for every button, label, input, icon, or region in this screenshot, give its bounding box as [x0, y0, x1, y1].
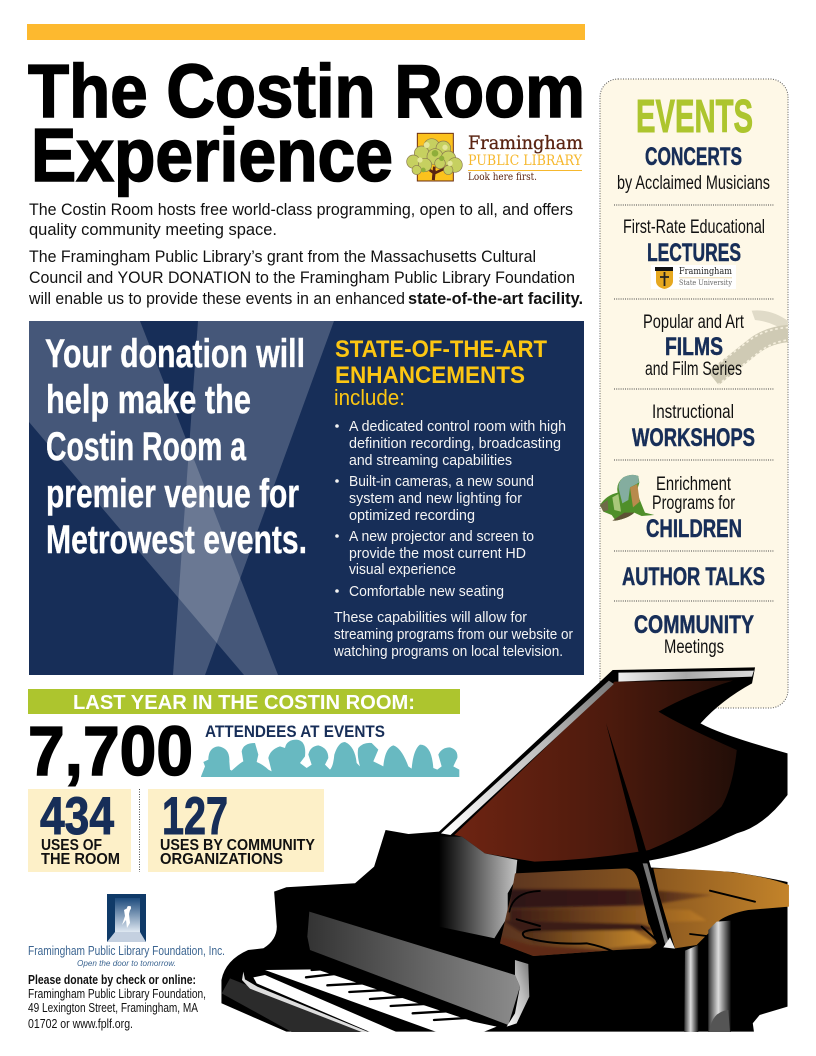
enhancements heading: ENHANCEMENTS	[335, 362, 525, 389]
author talks: AUTHOR TALKS	[622, 563, 765, 591]
enhancements heading: STATE-OF-THE-ART	[335, 336, 547, 363]
intro text: The Costin Room hosts free world-class programming, open to all, and offers	[29, 201, 573, 219]
donation heading: Metrowest events.	[46, 518, 307, 562]
community: COMMUNITY	[634, 611, 754, 639]
donation heading	[45, 332, 307, 562]
top yellow bar	[27, 24, 585, 40]
stat: 127 community uses: ORGANIZATIONS	[160, 851, 283, 868]
grand piano	[221, 667, 790, 1032]
intro text: Council and YOUR DONATION to the Framingham Public Library Foundation	[29, 269, 575, 287]
workshops: Instructional	[652, 402, 734, 423]
logo: Framingham Public Library: Framingham	[468, 132, 583, 154]
intro text	[28, 201, 583, 308]
stat: 127 community uses: USES BY COMMUNITY	[160, 837, 315, 854]
community: Meetings	[664, 637, 724, 658]
closing note: These capabilities will allow for	[334, 610, 527, 626]
bullet list: Comfortable new seating	[349, 584, 504, 600]
stat: 127 community uses: 127	[162, 787, 228, 846]
children: Programs for	[652, 493, 736, 514]
icon: film strip	[708, 310, 795, 385]
logo: Framingham Public Library: Look here first.	[468, 172, 537, 183]
stat: 7,700 attendees: 7,700	[28, 712, 193, 790]
donation heading: Your donation will	[45, 332, 305, 376]
stat: 434 uses	[28, 787, 131, 872]
concerts: CONCERTS	[645, 143, 742, 171]
bullet list: and streaming capabilities	[349, 453, 512, 469]
enhancements heading: include:	[334, 385, 405, 410]
films: Popular and Art	[643, 312, 745, 333]
children: CHILDREN	[646, 515, 742, 543]
intro text: state-of-the-art facility.	[408, 290, 583, 308]
intro text: The Framingham Public Library’s grant from the Massachusetts Cultural	[29, 248, 536, 266]
lectures: First-Rate Educational	[623, 217, 765, 238]
films: and Film Series	[645, 359, 742, 380]
icon: audience silhouettes	[201, 740, 459, 777]
logo: library foundation	[28, 894, 225, 968]
icon: iguana	[600, 475, 654, 521]
bullet list: Built-in cameras, a new sound	[349, 474, 534, 490]
closing note	[333, 610, 573, 660]
logo: library foundation: Framingham Public Library Foundation, Inc.	[28, 943, 225, 958]
donation heading: help make the	[46, 378, 251, 422]
bullet list: optimized recording	[349, 508, 475, 524]
banner: last year: LAST YEAR IN THE COSTIN ROOM:	[73, 692, 415, 714]
stat: 7,700 attendees: ATTENDEES AT EVENTS	[205, 722, 385, 741]
logo: Framingham Public Library	[407, 132, 583, 183]
title: Experience	[31, 113, 393, 197]
stat: 434 uses: THE ROOM	[41, 851, 120, 868]
bullet list: visual experience	[349, 562, 456, 578]
logo: Framingham State University: Framingham	[679, 267, 732, 277]
intro text: will enable us to provide these events in an enhanced	[28, 290, 405, 308]
stat: 434 uses: USES OF	[41, 837, 102, 854]
panel: events	[600, 79, 795, 708]
logo: Framingham State University	[651, 265, 736, 289]
films: FILMS	[665, 333, 723, 361]
workshops	[632, 402, 755, 452]
enhancements heading	[334, 336, 547, 410]
community	[634, 611, 754, 658]
stat: 7,700 attendees	[28, 712, 459, 790]
bullet list: A dedicated control room with high	[349, 419, 566, 435]
donation heading: Costin Room a	[46, 425, 247, 469]
banner: last year	[28, 689, 460, 714]
lectures: LECTURES	[647, 239, 741, 267]
donation details: Framingham Public Library Foundation,	[28, 986, 206, 1001]
bullet list: system and new lighting for	[349, 491, 522, 507]
lectures	[623, 217, 765, 289]
donation details: 49 Lexington Street, Framingham, MA	[28, 1000, 198, 1015]
films	[643, 312, 745, 380]
children: Enrichment	[656, 474, 732, 495]
title: The Costin Room	[28, 49, 585, 133]
stat: 127 community uses	[148, 787, 324, 872]
bullet list: definition recording, broadcasting	[349, 436, 561, 452]
bullet list	[335, 419, 566, 600]
closing note: watching programs on local television.	[333, 644, 563, 660]
logo: Framingham State University: State University	[679, 278, 733, 287]
bullet list: A new projector and screen to	[349, 529, 534, 545]
children	[646, 474, 742, 543]
concerts	[617, 143, 770, 194]
donation details	[28, 972, 206, 1031]
title	[28, 49, 585, 197]
donation heading: premier venue for	[46, 472, 299, 516]
intro text: quality community meeting space.	[29, 221, 277, 239]
donation details: Please donate by check or online:	[28, 972, 196, 987]
concerts: by Acclaimed Musicians	[617, 173, 770, 194]
logo: Framingham Public Library: PUBLIC LIBRARY	[468, 153, 583, 169]
bullet list: provide the most current HD	[349, 546, 526, 562]
events heading: EVENTS	[636, 90, 753, 142]
donation details: 01702 or www.fplf.org.	[28, 1016, 133, 1031]
stat: 434 uses: 434	[40, 787, 114, 846]
panel: donation and enhancements	[29, 321, 584, 675]
closing note: streaming programs from our website or	[334, 627, 573, 643]
logo: library foundation: Open the door to tomorrow.	[77, 958, 176, 968]
workshops: WORKSHOPS	[632, 424, 755, 452]
